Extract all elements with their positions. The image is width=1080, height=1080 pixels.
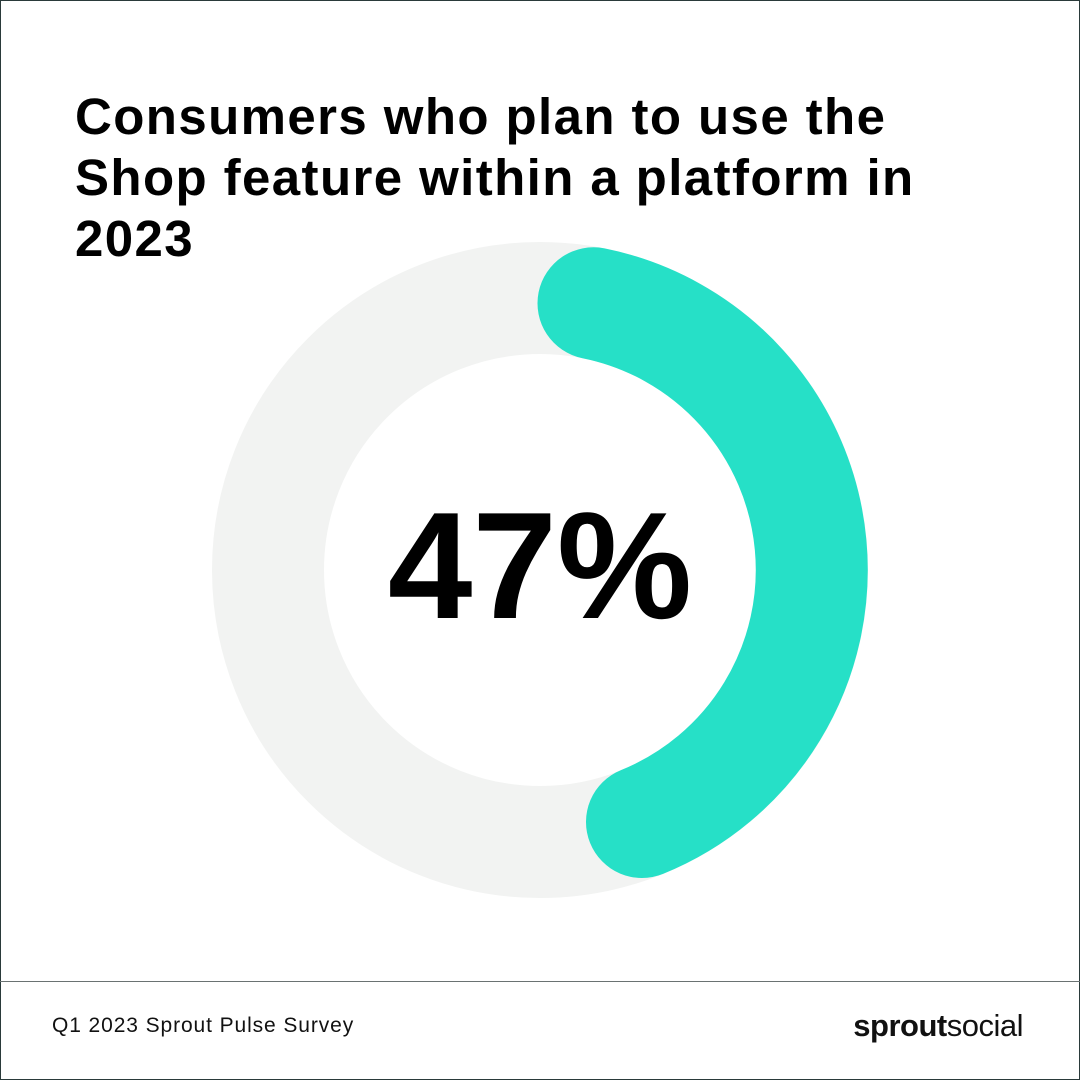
title: Shop feature within a platform in [75, 149, 915, 206]
title: Consumers who plan to use the [75, 88, 886, 145]
source text: Q1 2023 Sprout Pulse Survey [52, 1014, 354, 1037]
logo: sproutsocial [853, 1008, 1023, 1043]
title [75, 88, 915, 267]
title: 2023 [75, 210, 194, 267]
donut chart: 47% [388, 481, 692, 651]
